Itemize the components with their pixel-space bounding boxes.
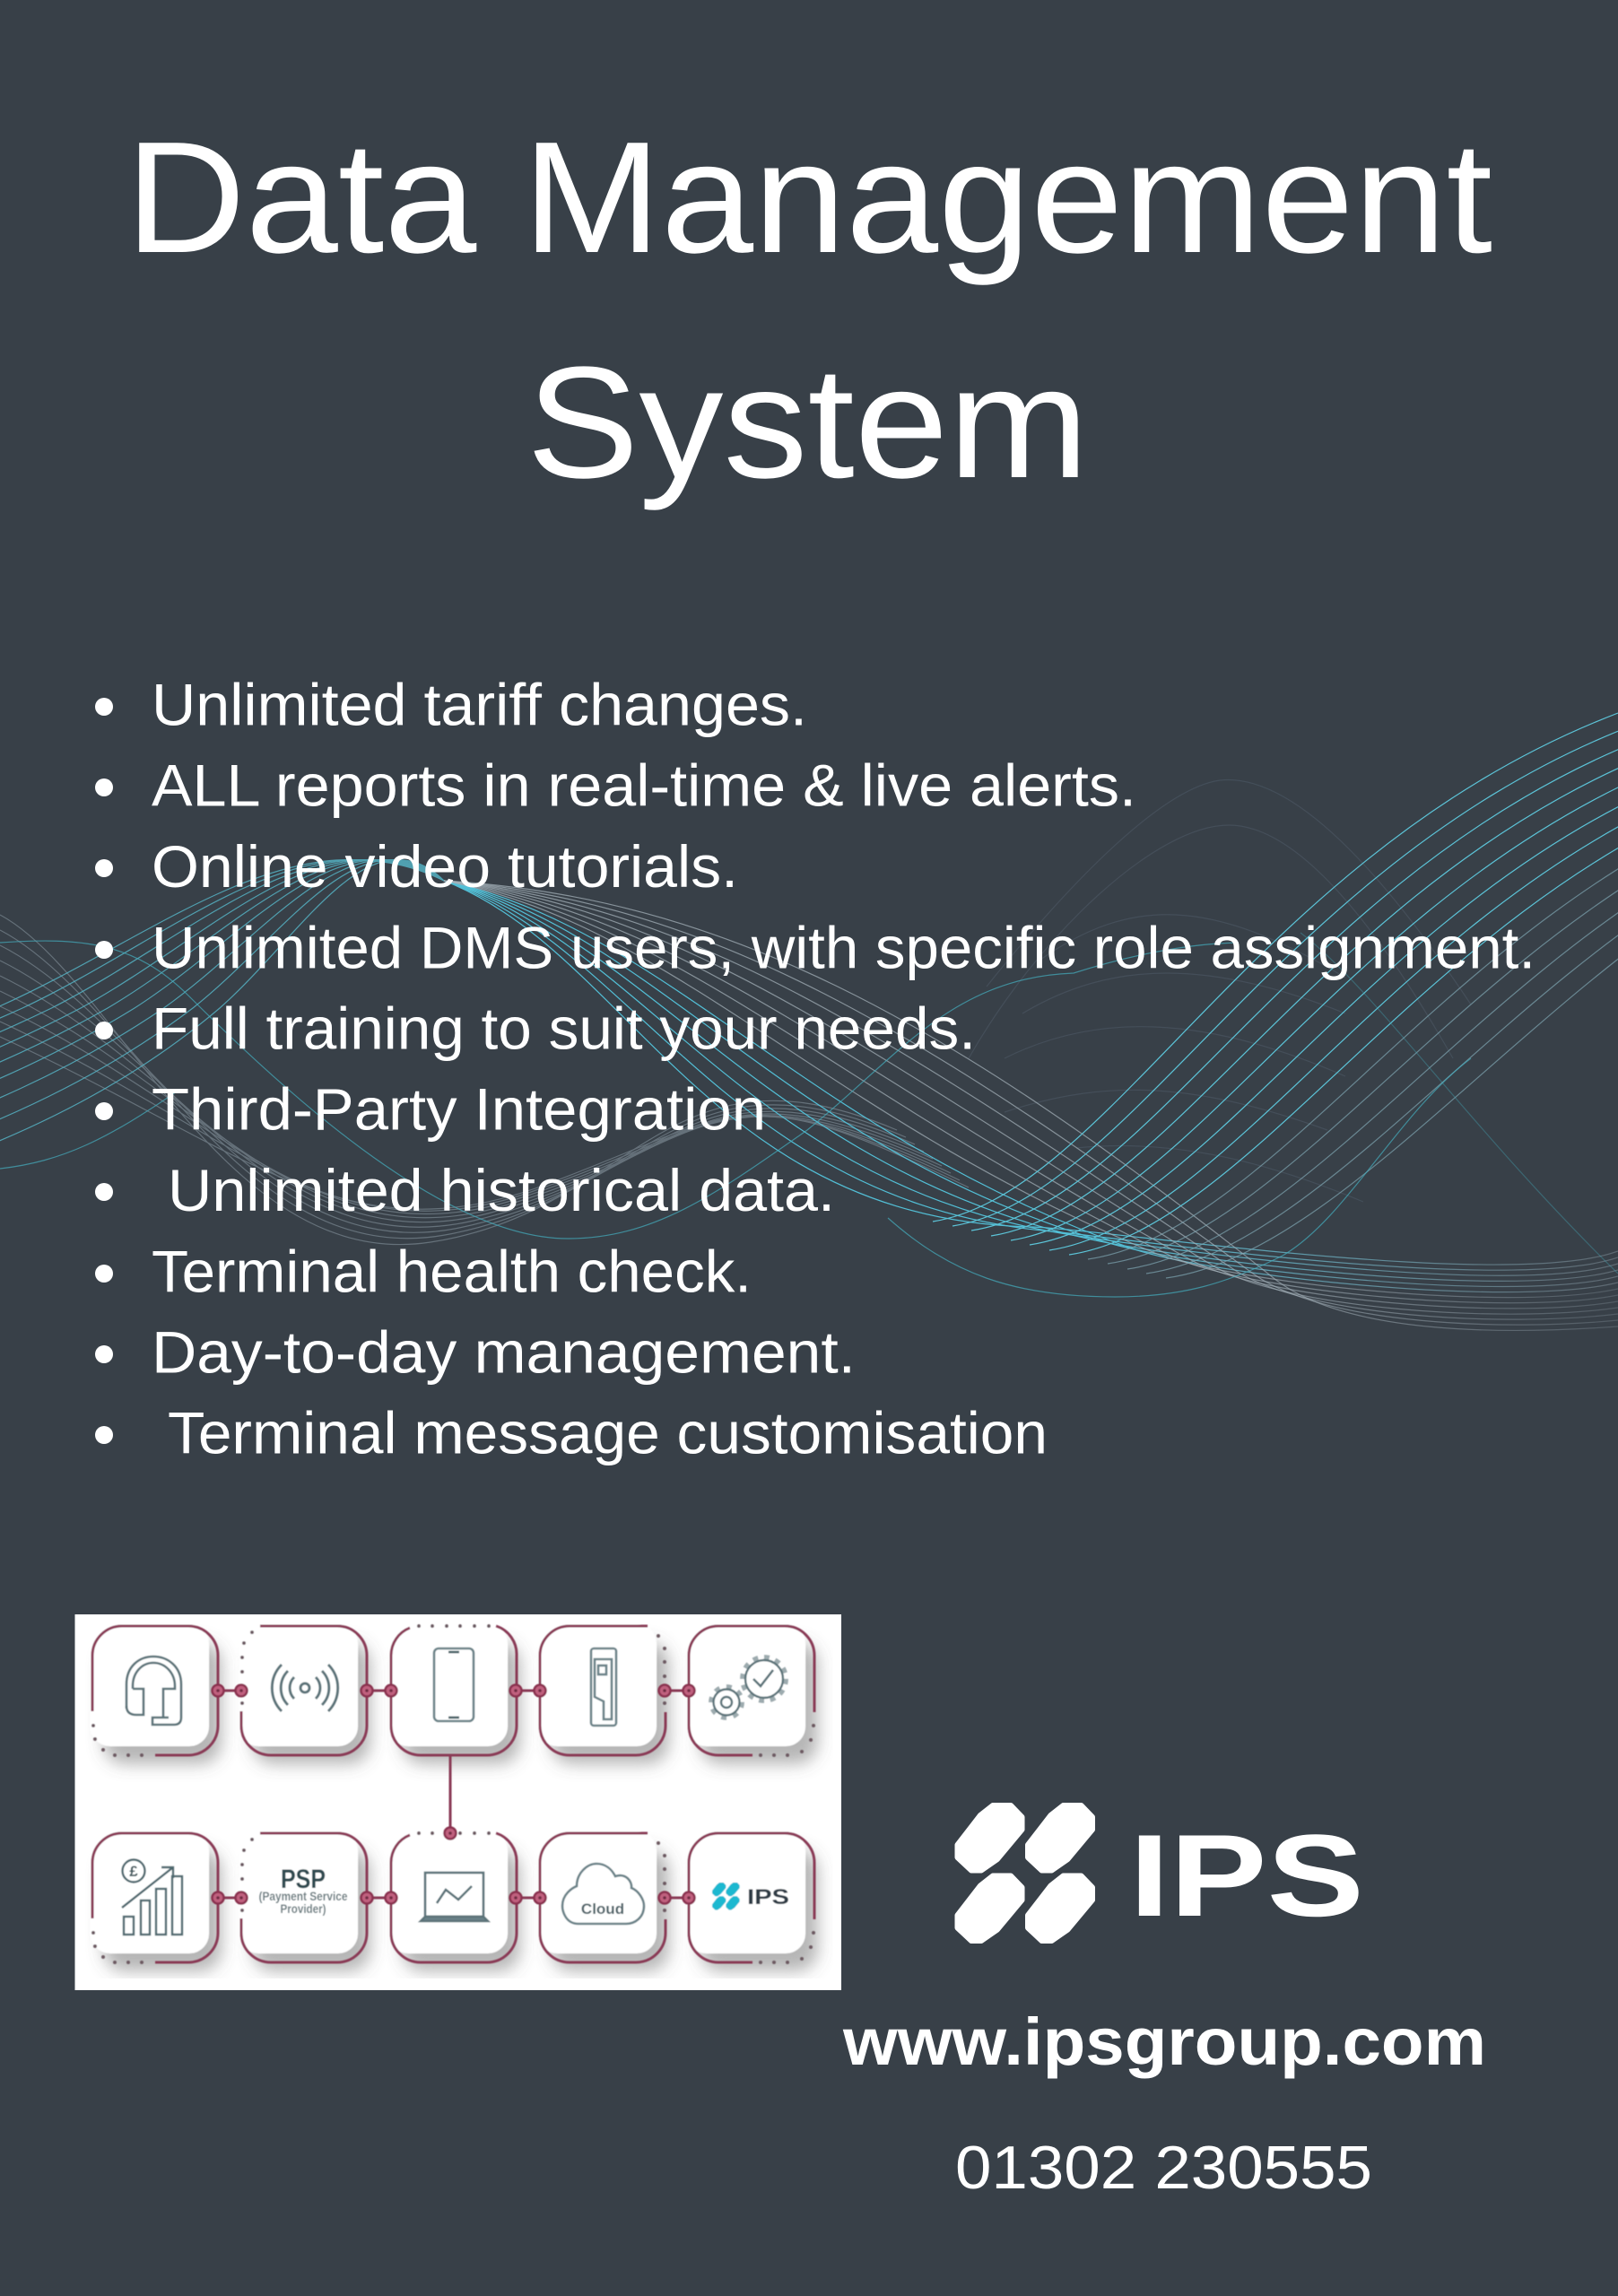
PSP label xyxy=(258,1865,348,1916)
IPS logo xyxy=(958,1805,1364,1941)
title: Data Management xyxy=(126,109,1492,286)
list item: tariff changes: Unlimited tariff changes. xyxy=(152,671,807,737)
PSP label: (Payment Service xyxy=(258,1890,348,1903)
row 2 tile: PSP xyxy=(239,1831,370,1971)
decorative wave mesh xyxy=(0,713,1618,1330)
feature bullet list xyxy=(95,671,1535,1465)
list item: health check: Terminal health check. xyxy=(152,1238,752,1304)
row 2 tile: revenue chart xyxy=(91,1831,222,1971)
list item: integration: Third-Party Integration xyxy=(152,1076,766,1143)
icon: cloud xyxy=(562,1864,644,1924)
list item: historical data: Unlimited historical data. xyxy=(168,1157,835,1223)
icon: cloud: Cloud xyxy=(581,1900,624,1918)
row 1 tile: gears xyxy=(687,1624,818,1764)
list item: DMS users: Unlimited DMS users, with specific role assignment. xyxy=(152,915,1535,981)
list item: day-to-day: Day-to-day management. xyxy=(152,1318,856,1385)
connectors and nodes xyxy=(212,1684,694,1903)
list item: training: Full training to suit your needs. xyxy=(152,996,976,1062)
list item: message customisation: Terminal message customisation xyxy=(168,1399,1048,1465)
row 2 tile: laptop xyxy=(389,1831,520,1971)
icon: headset xyxy=(126,1657,181,1725)
icon: rising revenue bars: £ xyxy=(129,1863,138,1880)
row 2 tile: IPS xyxy=(687,1831,818,1971)
list item: tutorials: Online video tutorials. xyxy=(152,833,738,900)
logo wordmark: IPS xyxy=(1129,1810,1364,1941)
row 1 tile: contactless signal xyxy=(239,1624,370,1764)
row 1 tile: headset xyxy=(91,1624,222,1764)
row 1 tile: smartphone xyxy=(389,1624,520,1764)
icon: rising revenue bars xyxy=(122,1860,182,1935)
PSP label: PSP xyxy=(281,1865,326,1894)
icon: smartphone xyxy=(434,1648,474,1721)
icon: contactless waves xyxy=(272,1665,338,1711)
row 2 tile: cloud xyxy=(538,1831,669,1971)
website: www.ipsgroup.com xyxy=(842,2005,1486,2079)
phone number: 01302 230555 xyxy=(955,2134,1372,2202)
icon: laptop with trend line xyxy=(421,1873,488,1921)
small IPS logo xyxy=(713,1883,789,1909)
icon: parking terminal xyxy=(591,1648,616,1726)
list item: reports: ALL reports in real-time & live alerts. xyxy=(152,752,1136,818)
title: System xyxy=(526,334,1089,511)
panel: system diagram image xyxy=(75,1614,841,1990)
title xyxy=(126,109,1492,511)
icon: gears with check xyxy=(710,1657,786,1718)
small IPS logo: IPS xyxy=(747,1885,789,1909)
PSP label: Provider) xyxy=(280,1902,326,1916)
icon: logo clover xyxy=(958,1805,1092,1941)
row 1 tile: parking terminal xyxy=(538,1624,669,1764)
diagram content xyxy=(91,1624,818,1971)
